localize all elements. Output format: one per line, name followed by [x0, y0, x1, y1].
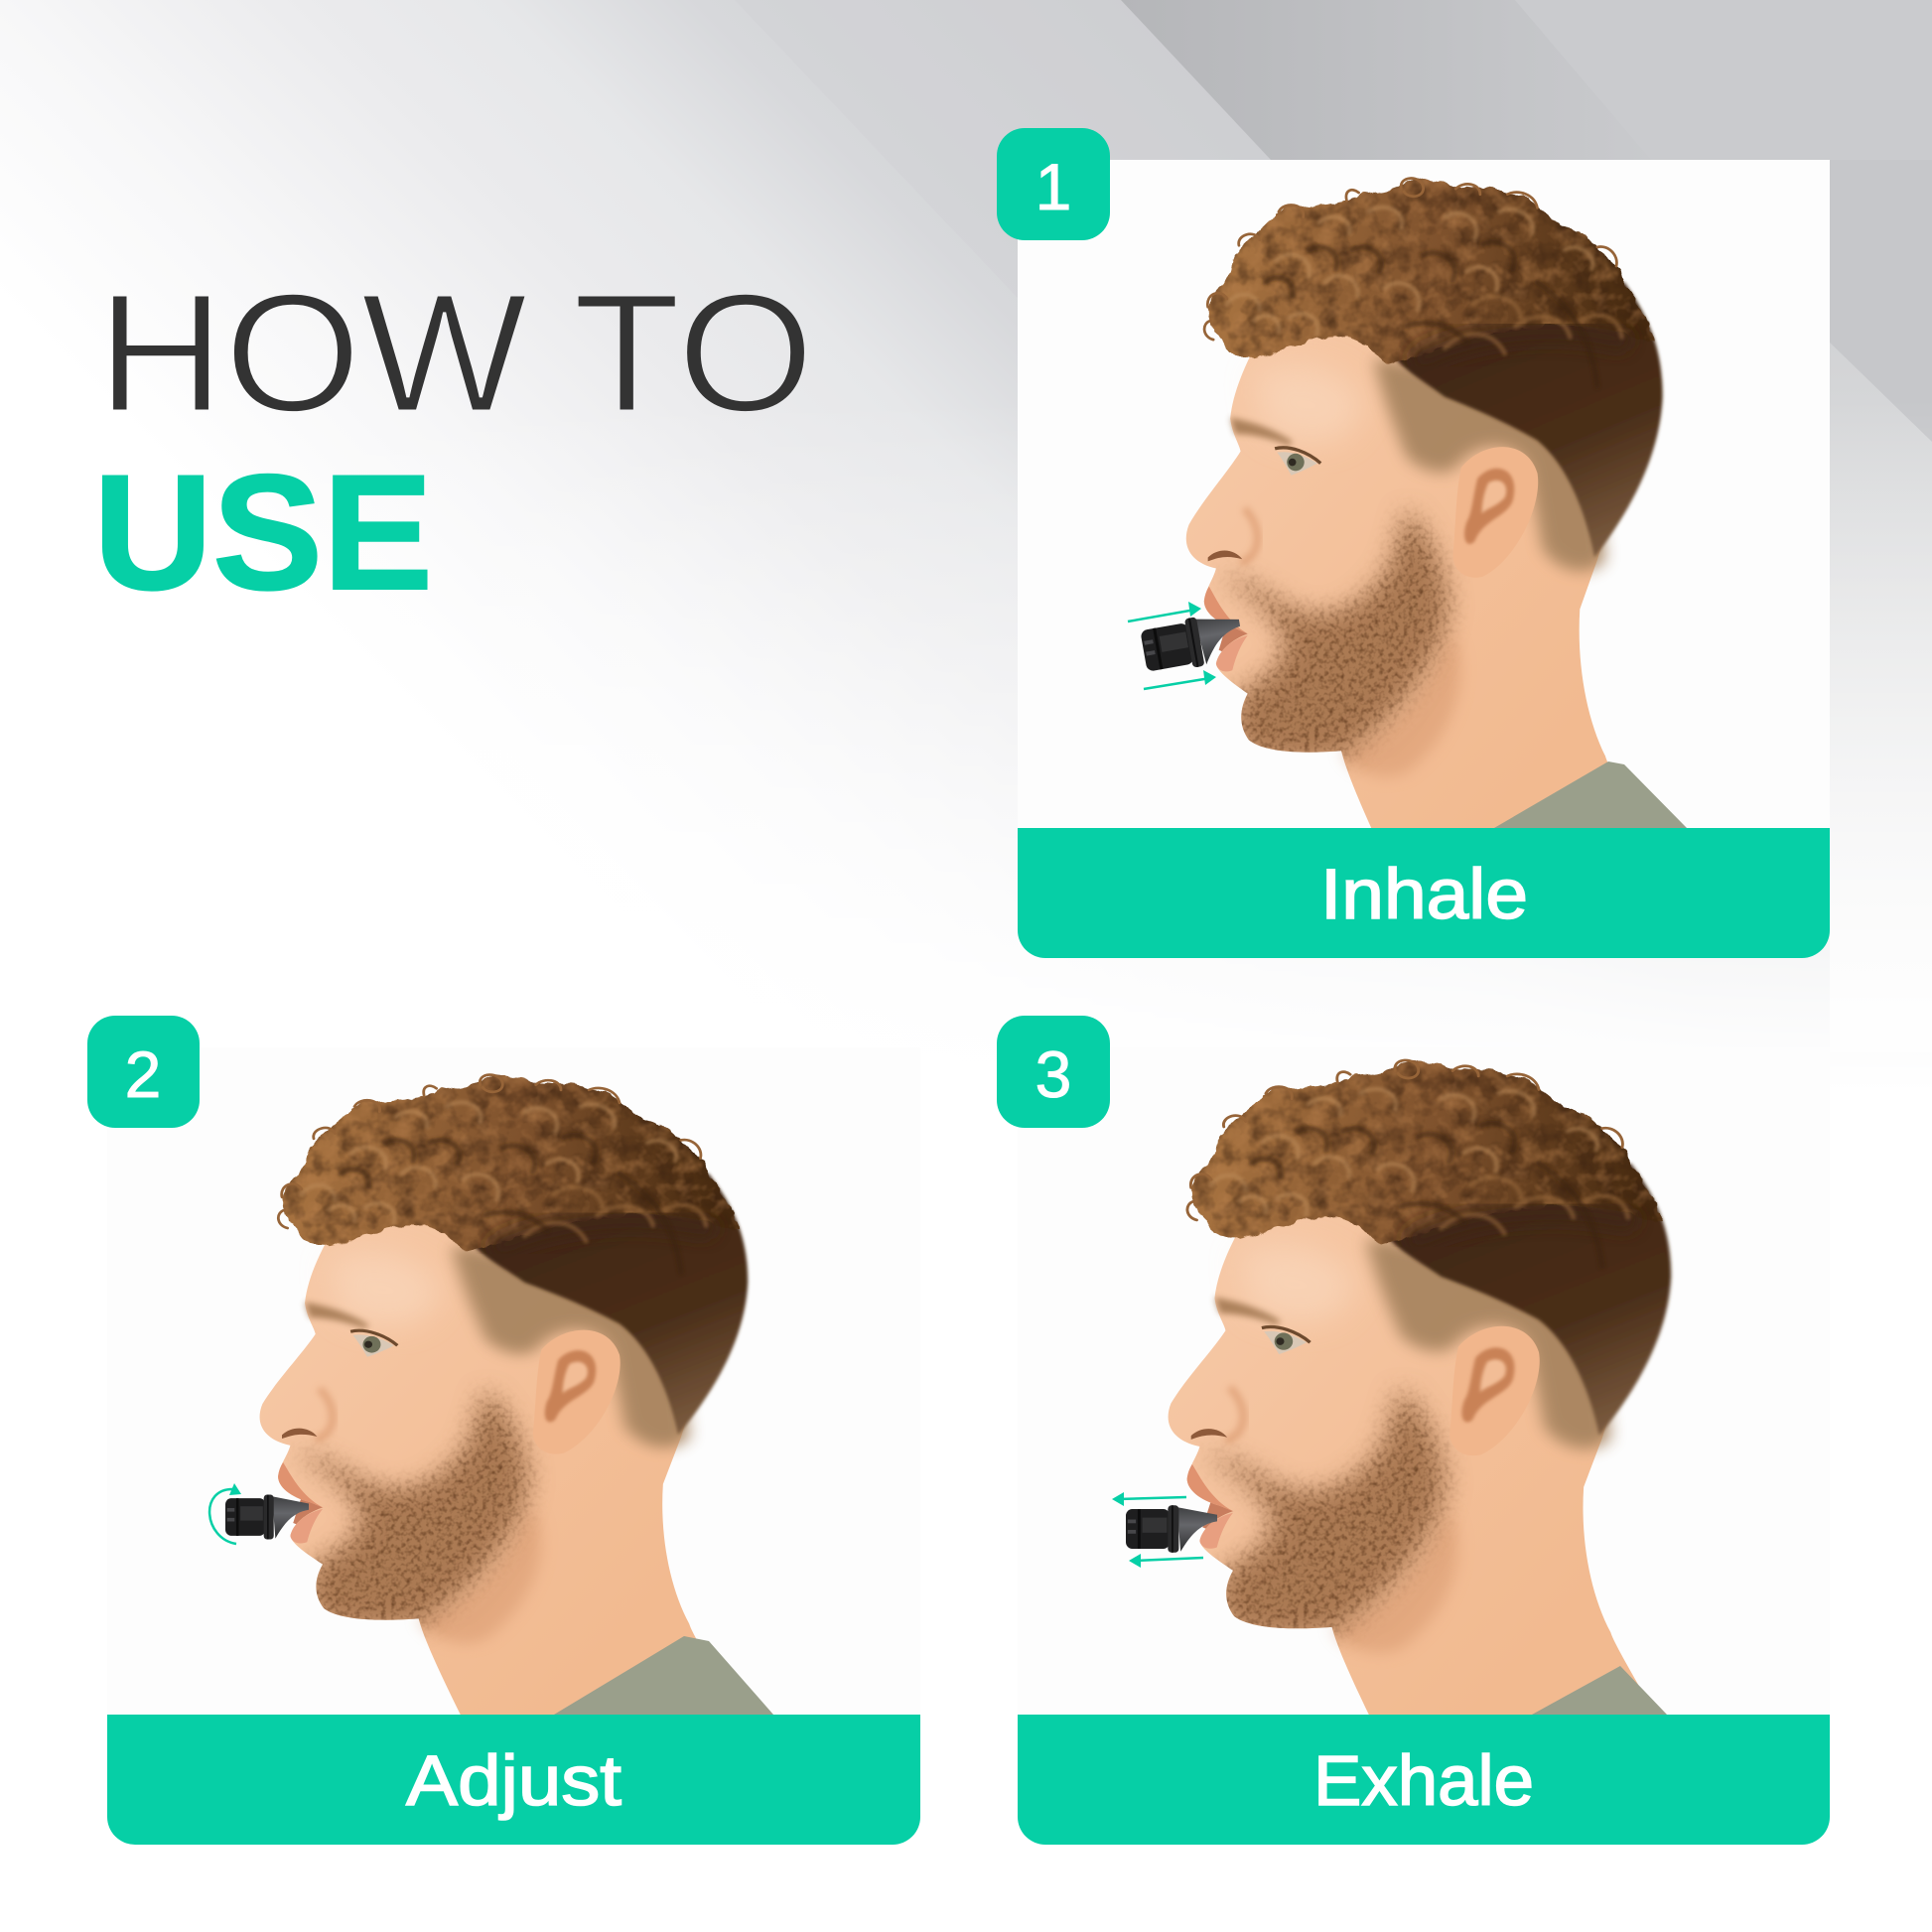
badge: number 3 [997, 1016, 1110, 1128]
arrows: air flowing out [1112, 1492, 1203, 1568]
badge: number 1: 1 [1035, 150, 1071, 223]
label band: Exhale: Exhale [1313, 1742, 1534, 1821]
person photo: head with device inhaling [1185, 177, 1687, 828]
title line: USE: USE [93, 441, 433, 623]
label band: Inhale: Inhale [1320, 856, 1528, 934]
title line: HOW TO: HOW TO [97, 259, 814, 448]
photo background [1018, 160, 1830, 835]
panel: step 3 exhale [997, 1016, 1830, 1845]
label band: Adjust [107, 1715, 920, 1845]
arrows: air flowing in [1128, 602, 1216, 689]
photo background [107, 1047, 920, 1723]
badge: number 2: 2 [125, 1037, 161, 1111]
label band: Adjust: Adjust [406, 1742, 621, 1821]
icon: breathing device [1126, 1505, 1217, 1553]
title [93, 259, 814, 623]
label band: Inhale [1018, 828, 1830, 958]
person photo: head with device exhaling [1168, 1058, 1674, 1715]
badge: number 1 [997, 128, 1110, 240]
panel: step 1 inhale [997, 128, 1830, 958]
icon: breathing device [225, 1495, 309, 1539]
label band: Exhale [1018, 1715, 1830, 1845]
icon: breathing device [1140, 610, 1246, 676]
photo background [1018, 1047, 1830, 1723]
badge: number 2 [87, 1016, 200, 1128]
person photo: head with device adjusting [260, 1073, 773, 1715]
panel: step 2 adjust [87, 1016, 920, 1845]
badge: number 3: 3 [1035, 1037, 1071, 1111]
arrow: rotate adjustment [209, 1483, 241, 1544]
